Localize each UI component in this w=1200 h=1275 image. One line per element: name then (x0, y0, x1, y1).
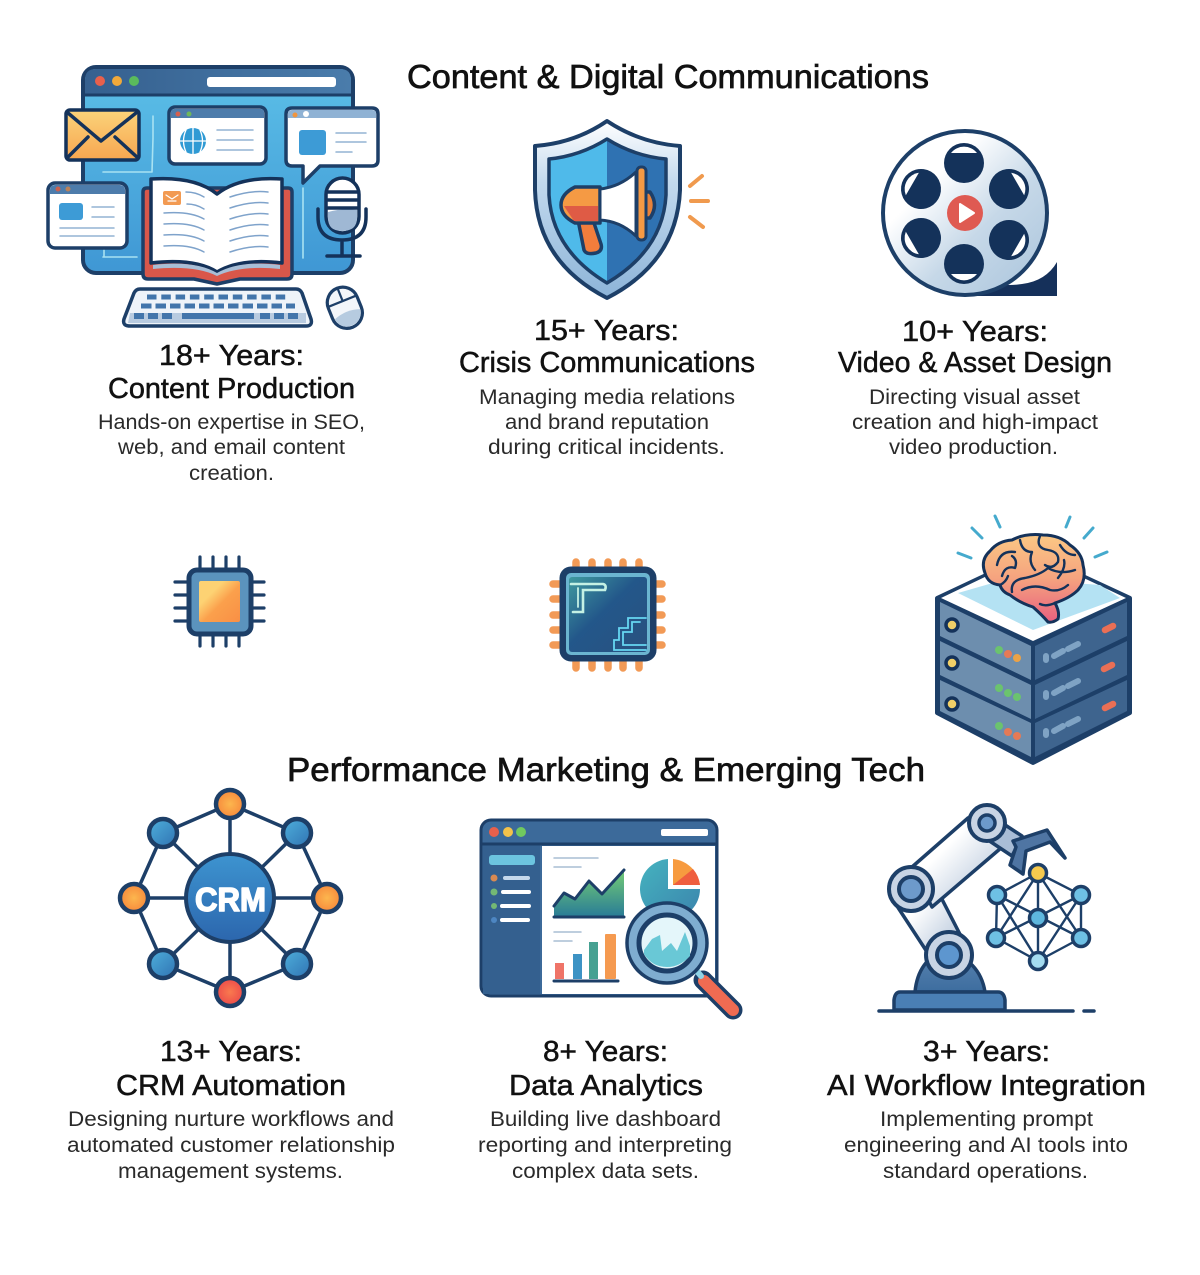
description: content production (98, 410, 365, 485)
robot arm segments (897, 818, 1022, 958)
CRM hub (186, 854, 274, 942)
title: 3+ Years AI Workflow Integration: AI Workflow Integration (827, 1070, 1146, 1102)
idea rays (958, 516, 1107, 558)
panel: data analytics (478, 820, 733, 1183)
brain (983, 535, 1084, 622)
icon: film reel with play button (883, 131, 1057, 296)
neural network (988, 864, 1090, 970)
description: crisis communications: during critical incidents. (488, 435, 725, 459)
description: content production: web, and email content (117, 435, 345, 459)
panel: AI workflow integration (827, 805, 1146, 1183)
description: AI workflow integration: engineering and AI tools into (844, 1133, 1128, 1157)
robot base (894, 950, 1005, 1010)
sound rays (690, 176, 708, 227)
envelope (66, 110, 139, 160)
browser window (83, 67, 353, 273)
icon: brain above server stack (937, 516, 1130, 763)
description: data analytics (478, 1107, 732, 1183)
reel disc (883, 131, 1047, 295)
network nodes (120, 790, 341, 1006)
dashboard window (481, 820, 717, 996)
title: 8+ Years Data Analytics (509, 1036, 703, 1102)
description: CRM automation: automated customer relationship (67, 1133, 395, 1157)
center web window (169, 107, 266, 164)
description: CRM automation: Designing nurture workflows and (68, 1107, 394, 1131)
description: crisis communications (479, 385, 735, 459)
description: video and asset design: Directing visual asset (869, 385, 1080, 409)
description: CRM automation: management systems. (118, 1159, 343, 1183)
description: crisis communications: Managing media relations (479, 385, 735, 409)
status lights (946, 619, 1113, 740)
heading: Performance Marketing & Emerging Tech: Performance Marketing & Emerging Tech (287, 752, 925, 789)
description: video and asset design: creation and high-impact (852, 410, 1098, 434)
heading: Content & Digital Communications: Content & Digital Communications (407, 59, 929, 96)
title: 15+ Years Crisis Communications: 15+ Years: (534, 315, 679, 347)
left content window (48, 183, 127, 248)
panel: video and asset design (838, 131, 1112, 459)
icon: browser workspace with book, keyboard and microphone (48, 67, 378, 333)
description: AI workflow integration (844, 1107, 1128, 1183)
title: 15+ Years Crisis Communications (459, 315, 755, 379)
shield (535, 121, 680, 298)
title: 15+ Years Crisis Communications: Crisis Communications (459, 347, 755, 379)
megaphone (561, 167, 654, 254)
description: data analytics: complex data sets. (512, 1159, 699, 1183)
line chart (554, 858, 624, 917)
title: 10+ Years Video & Asset Design: Video & Asset Design (838, 347, 1112, 379)
arm joints (889, 805, 1005, 978)
description: data analytics: reporting and interpreting (478, 1133, 732, 1157)
description: CRM automation (67, 1107, 395, 1183)
title: 8+ Years Data Analytics: Data Analytics (509, 1070, 703, 1102)
bar chart (554, 932, 618, 981)
sidebar menu (489, 855, 535, 923)
panel: CRM automation (67, 790, 395, 1183)
keyboard (124, 289, 311, 326)
icon: robot arm and neural network (879, 805, 1094, 1011)
icon: analytics dashboard with magnifier (481, 820, 733, 1010)
title: 10+ Years Video & Asset Design (838, 316, 1112, 379)
title: 18+ Years Content Production: 18+ Years: (159, 340, 304, 372)
title: 13+ Years CRM Automation: 13+ Years: (160, 1036, 302, 1068)
panel: content production (48, 67, 378, 485)
server stack (937, 553, 1130, 763)
title: 8+ Years Data Analytics: 8+ Years: (543, 1036, 668, 1068)
film tail (975, 262, 1057, 296)
title: 18+ Years Content Production (108, 340, 355, 405)
magnifier (627, 903, 733, 1010)
reel holes (894, 143, 1036, 284)
title: 10+ Years Video & Asset Design: 10+ Years: (902, 316, 1048, 348)
gripper (1010, 830, 1065, 874)
icon: circuit processor chip (553, 562, 662, 668)
title: 3+ Years AI Workflow Integration: 3+ Years: (923, 1036, 1050, 1068)
description: AI workflow integration: standard operations. (883, 1159, 1088, 1183)
ground line (879, 1009, 1094, 1013)
description: data analytics: Building live dashboard (490, 1107, 721, 1131)
title: 13+ Years CRM Automation: CRM Automation (116, 1070, 346, 1102)
title: 18+ Years Content Production: Content Production (108, 373, 355, 405)
icon: shield with megaphone (535, 121, 708, 298)
play button (947, 195, 983, 231)
CRM hub: CRM (195, 881, 266, 918)
description: crisis communications: and brand reputation (505, 410, 709, 434)
mouse (323, 282, 367, 333)
speech bubble window (286, 108, 378, 183)
panel: crisis communications (459, 121, 755, 459)
title: 3+ Years AI Workflow Integration (827, 1036, 1146, 1102)
description: video and asset design: video production. (889, 435, 1058, 459)
description: content production: Hands-on expertise in SEO, (98, 410, 365, 434)
title: 13+ Years CRM Automation (116, 1036, 346, 1102)
open book (143, 179, 292, 284)
icon: CRM hub network (120, 790, 341, 1006)
description: content production: creation. (189, 461, 274, 485)
microphone (318, 178, 366, 256)
description: AI workflow integration: Implementing prompt (880, 1107, 1093, 1131)
pie chart (640, 859, 700, 919)
network links (134, 804, 327, 992)
description: video and asset design (852, 385, 1098, 459)
icon: small processor chip (175, 557, 264, 646)
